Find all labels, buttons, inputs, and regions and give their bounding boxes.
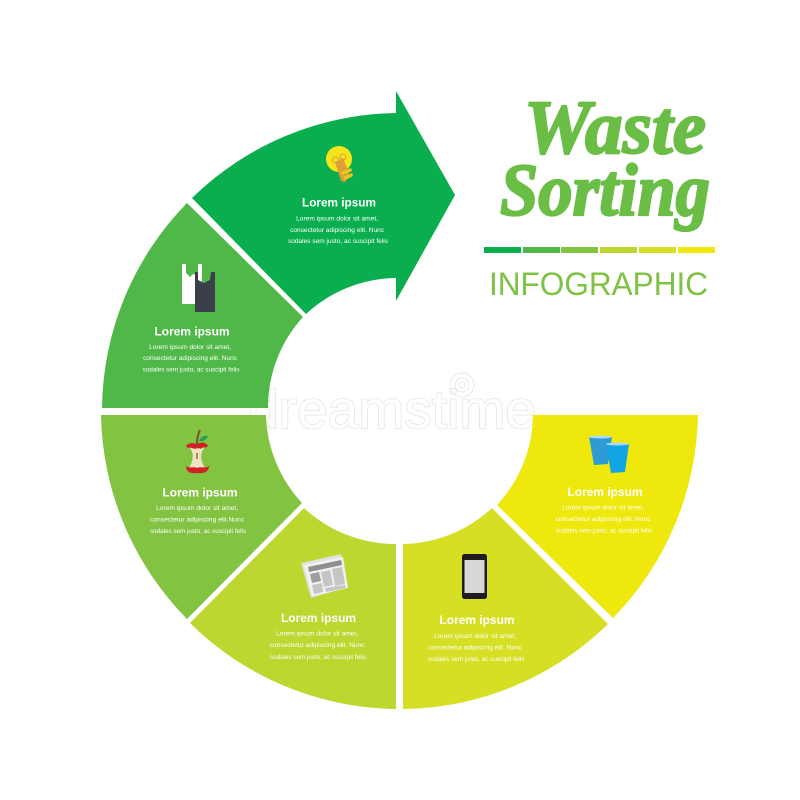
icon: light bulb xyxy=(326,146,353,182)
heading: Lorem ipsum xyxy=(281,611,356,625)
heading: Lorem ipsum xyxy=(154,324,230,338)
title: Sorting xyxy=(500,150,710,232)
body text: Lorem ipsum dolor sit amet, xyxy=(156,505,238,512)
title: Waste xyxy=(524,86,706,170)
body text: consectetur adipiscing elit. Nunc xyxy=(143,355,238,362)
panel: step 1 arrow, lightbulb xyxy=(192,91,455,314)
panel: step 5 phone xyxy=(403,508,608,709)
arrow segment xyxy=(192,91,455,314)
body text: sodales sem justo, ac suscipit felis xyxy=(556,528,653,534)
icon: newspaper xyxy=(301,554,348,598)
icon: smartphone xyxy=(462,554,487,599)
body text: consectetur adipiscing elit. Nunc xyxy=(428,644,523,652)
title xyxy=(500,86,710,232)
heading: Lorem ipsum xyxy=(440,613,514,627)
icon: apple core xyxy=(186,430,209,473)
body text: sodales sem justo, ac suscipit felis xyxy=(288,238,389,245)
icon: blue cups xyxy=(589,436,629,473)
heading: Lorem ipsum xyxy=(162,486,238,500)
segment xyxy=(101,415,302,619)
body text: Lorem ipsum dolor sit amet, xyxy=(434,633,516,640)
segment xyxy=(497,415,698,618)
panel: step 2 plastic bags xyxy=(102,203,303,408)
panel: step 3 apple core xyxy=(101,415,302,619)
body text: consectetur adipiscing elit. Nunc xyxy=(290,227,385,234)
subtitle: INFOGRAPHIC xyxy=(489,266,708,302)
body text: Lorem ipsum dolor sit amet, xyxy=(149,344,231,351)
body text: Lorem ipsum dolor sit amet, xyxy=(562,504,644,512)
body text: consectetur adipiscing elit.Nunc xyxy=(150,516,245,524)
icon: plastic bags xyxy=(182,264,215,312)
body text: Lorem ipsum dolor sit amet, xyxy=(296,216,378,222)
body text: consectetur adipiscing elit. Nunc xyxy=(270,642,365,649)
body text: sodales sem justo, ac suscipit felis xyxy=(270,654,367,661)
body text: sodales sem justo, ac suscipit felis xyxy=(142,366,240,374)
segment xyxy=(403,508,608,709)
panel: step 6 cups xyxy=(497,415,698,618)
panel: step 4 newspaper xyxy=(190,508,396,709)
body text: sodales sem justo, ac suscipit felis xyxy=(428,656,525,663)
segment xyxy=(190,508,396,709)
colour legend bar xyxy=(484,247,715,253)
heading: Lorem ipsum xyxy=(568,485,642,499)
body text: Lorem ipsum dolor sit amet, xyxy=(276,630,358,638)
body text: sodales sem justo, ac suscipit felis xyxy=(150,528,247,535)
watermark: dreamstime xyxy=(248,380,536,440)
heading: Lorem ipsum xyxy=(302,196,376,210)
body text: consectetur adipiscing elit. Nunc xyxy=(556,516,651,523)
segment xyxy=(102,203,303,408)
